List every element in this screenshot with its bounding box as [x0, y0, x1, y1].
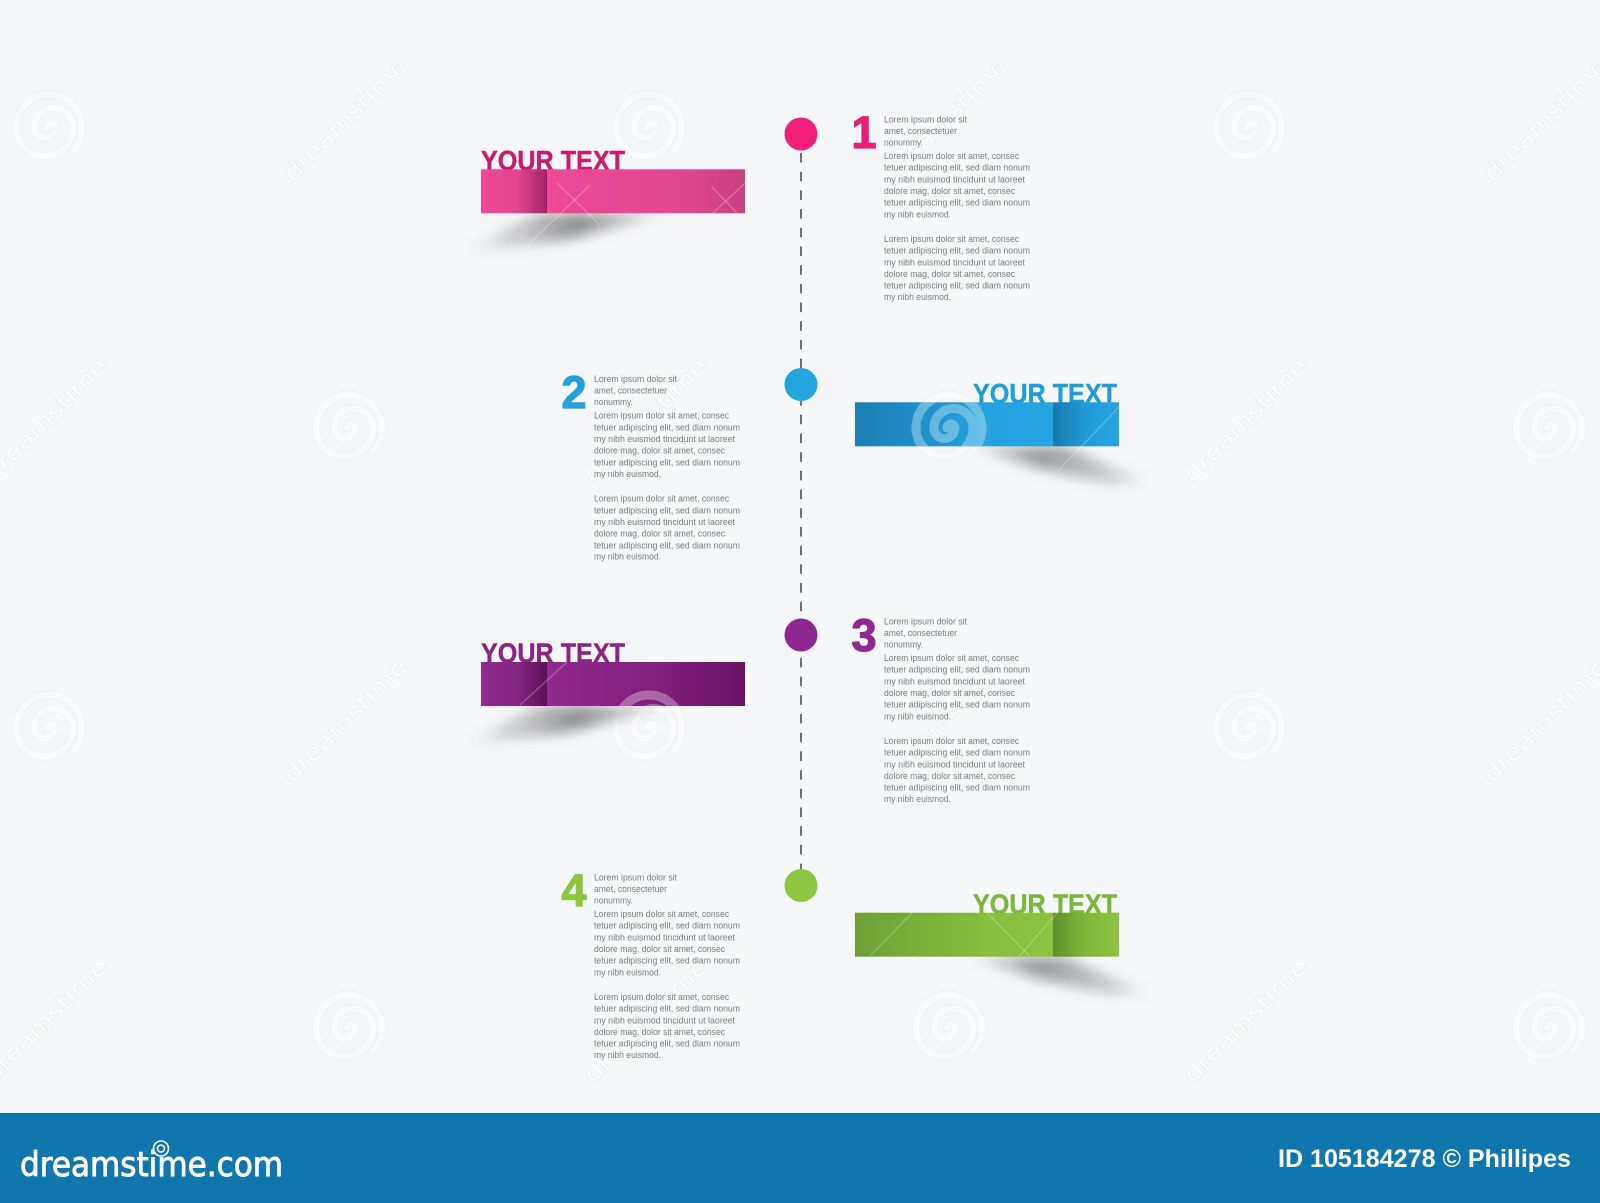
ribbon 2: blue [855, 378, 1152, 485]
step 1 text block: Lorem ipsum dolor sit amet, consec [884, 151, 1019, 161]
step 1 text block: my nibh euismod tincidunt ut laoreet [884, 257, 1025, 267]
step 2 text block: my nibh euismod tincidunt ut laoreet [594, 517, 735, 527]
timeline dashed line [800, 153, 802, 872]
step 3 text block: tetuer adipiscing elit, sed diam nonum [884, 700, 1030, 710]
step 2 text block: tetuer adipiscing elit, sed diam nonum [594, 540, 740, 550]
ribbon 3 heading: YOUR TEXT [481, 638, 625, 669]
watermark: spirals and dreamstime text: dreamstime [1179, 954, 1313, 1088]
step 2 number: 2 [561, 367, 587, 418]
step 4 text block: tetuer adipiscing elit, sed diam nonum [594, 921, 740, 931]
step 1 text block: tetuer adipiscing elit, sed diam nonum [884, 163, 1030, 173]
step 3 text block: nonummy. [884, 640, 923, 650]
timeline dot 4 [784, 869, 818, 902]
step 1 text block: my nibh euismod. [884, 292, 951, 302]
step 1 text block: Lorem ipsum dolor sit [884, 114, 967, 124]
ribbon 2 bar [855, 395, 1119, 472]
step 1 text block: dolore mag, dolor sit amet, consec [884, 269, 1015, 279]
step 4 text block: my nibh euismod tincidunt ut laoreet [594, 1015, 735, 1025]
step 1 text block: my nibh euismod tincidunt ut laoreet [884, 174, 1025, 184]
step 1 text block: tetuer adipiscing elit, sed diam nonum [884, 198, 1030, 208]
step 4 text block: tetuer adipiscing elit, sed diam nonum [594, 1039, 740, 1049]
step 2 text block [594, 374, 740, 562]
step 4 text block: nonummy. [594, 896, 633, 906]
step 2 text block: tetuer adipiscing elit, sed diam nonum [594, 457, 740, 467]
step 2 text block: Lorem ipsum dolor sit [594, 374, 677, 384]
step 3 text block: my nibh euismod. [884, 794, 951, 804]
ribbon 1 bar [481, 169, 745, 245]
step 2 text block: Lorem ipsum dolor sit amet, consec [594, 411, 729, 421]
step 2 text block: amet, consectetuer [594, 386, 667, 396]
step 3 text block: dolore mag, dolor sit amet, consec [884, 771, 1015, 781]
step 2 text block: nonummy. [594, 397, 633, 407]
timeline dot 1 [784, 118, 818, 150]
footer image id and credit: ID 105184278 © Phillipes [1278, 1145, 1571, 1173]
step 1 text block: nonummy. [884, 138, 923, 148]
watermark: spirals and dreamstime text: dreamstime [579, 353, 713, 488]
watermark: spirals and dreamstime text: dreamstime [1179, 353, 1313, 488]
step 1 text block: tetuer adipiscing elit, sed diam nonum [884, 281, 1030, 291]
watermark: spirals and dreamstime text: dreamstime [279, 654, 413, 788]
ribbon 4 heading: YOUR TEXT [973, 888, 1117, 920]
ribbon 4 shadow [965, 956, 1152, 996]
step 3 text block: amet, consectetuer [884, 628, 957, 638]
ribbon 2 heading: YOUR TEXT [973, 378, 1117, 409]
step 1 text block: dolore mag, dolor sit amet, consec [884, 186, 1015, 196]
step 2 text block: dolore mag, dolor sit amet, consec [594, 529, 725, 539]
step 2 text block: Lorem ipsum dolor sit amet, consec [594, 494, 729, 504]
watermark: spirals and dreamstime text: dreamstime [879, 654, 1013, 788]
logo spiral icon [154, 1141, 168, 1156]
step 4 text block: Lorem ipsum dolor sit amet, consec [594, 992, 729, 1002]
ribbon 1 shadow [466, 213, 672, 252]
step 1 text block: my nibh euismod. [884, 209, 951, 219]
timeline dot 2 [784, 368, 818, 401]
step 3 text block: Lorem ipsum dolor sit [884, 616, 967, 626]
step 3 text block [884, 616, 1030, 804]
footer logo: dreamstime.com [20, 1145, 283, 1185]
step 4 text block: Lorem ipsum dolor sit [594, 872, 677, 882]
step 3 number: 3 [851, 610, 877, 661]
step 1 text block: tetuer adipiscing elit, sed diam nonum [884, 246, 1030, 256]
step 3 text block: dolore mag, dolor sit amet, consec [884, 688, 1015, 698]
step 4 text block: amet, consectetuer [594, 884, 667, 894]
ribbon 3 bar [481, 662, 745, 706]
step 2 text block: dolore mag, dolor sit amet, consec [594, 446, 725, 456]
step 3 text block: my nibh euismod. [884, 711, 951, 721]
watermark: spirals and dreamstime text: dreamstime [579, 954, 713, 1088]
step 4 number: 4 [561, 865, 587, 916]
ribbon 4 bar [855, 913, 1119, 957]
step 3 text block: Lorem ipsum dolor sit amet, consec [884, 736, 1019, 746]
step 2 text block: tetuer adipiscing elit, sed diam nonum [594, 422, 740, 432]
timeline dot 3 [784, 618, 818, 652]
step 4 text block: my nibh euismod. [594, 1050, 661, 1060]
step 4 text block: dolore mag, dolor sit amet, consec [594, 944, 725, 954]
ribbon 3: purple [480, 643, 745, 746]
step 3 text block: tetuer adipiscing elit, sed diam nonum [884, 665, 1030, 675]
step 1 text block: amet, consectetuer [884, 126, 957, 136]
step 2 text block: my nibh euismod tincidunt ut laoreet [594, 434, 735, 444]
watermark: spirals and dreamstime text: dreamstime [1479, 53, 1600, 187]
watermark: spirals and dreamstime text: dreamstime [279, 53, 413, 187]
ribbon 1 heading: YOUR TEXT [481, 145, 625, 176]
ribbon 4: green [855, 888, 1152, 996]
step 1 text block: Lorem ipsum dolor sit amet, consec [884, 234, 1019, 244]
step 4 text block: Lorem ipsum dolor sit amet, consec [594, 909, 729, 919]
footer band [0, 1113, 1600, 1203]
step 1 number: 1 [851, 107, 877, 158]
step 4 text block: my nibh euismod. [594, 967, 661, 977]
step 3 text block: my nibh euismod tincidunt ut laoreet [884, 759, 1025, 769]
step 2 text block: tetuer adipiscing elit, sed diam nonum [594, 505, 740, 515]
step 3 text block: Lorem ipsum dolor sit amet, consec [884, 653, 1019, 663]
step 2 text block: my nibh euismod. [594, 469, 661, 479]
step 4 text block: tetuer adipiscing elit, sed diam nonum [594, 1004, 740, 1014]
watermark: spirals and dreamstime text: dreamstime [879, 53, 1013, 187]
step 1 text block [884, 114, 1030, 302]
step 4 text block: tetuer adipiscing elit, sed diam nonum [594, 956, 740, 966]
step 3 text block: my nibh euismod tincidunt ut laoreet [884, 676, 1025, 686]
step 4 text block: my nibh euismod tincidunt ut laoreet [594, 932, 735, 942]
watermark: spirals and dreamstime text: dreamstime [1479, 654, 1600, 788]
step 2 text block: my nibh euismod. [594, 552, 661, 562]
step 3 text block: tetuer adipiscing elit, sed diam nonum [884, 783, 1030, 793]
ribbon 1: pink [466, 145, 745, 252]
step 4 text block [594, 872, 740, 1060]
ribbon 2 shadow [965, 446, 1152, 485]
step 3 text block: tetuer adipiscing elit, sed diam nonum [884, 748, 1030, 758]
ribbon 3 shadow [466, 706, 672, 745]
step 4 text block: dolore mag, dolor sit amet, consec [594, 1027, 725, 1037]
